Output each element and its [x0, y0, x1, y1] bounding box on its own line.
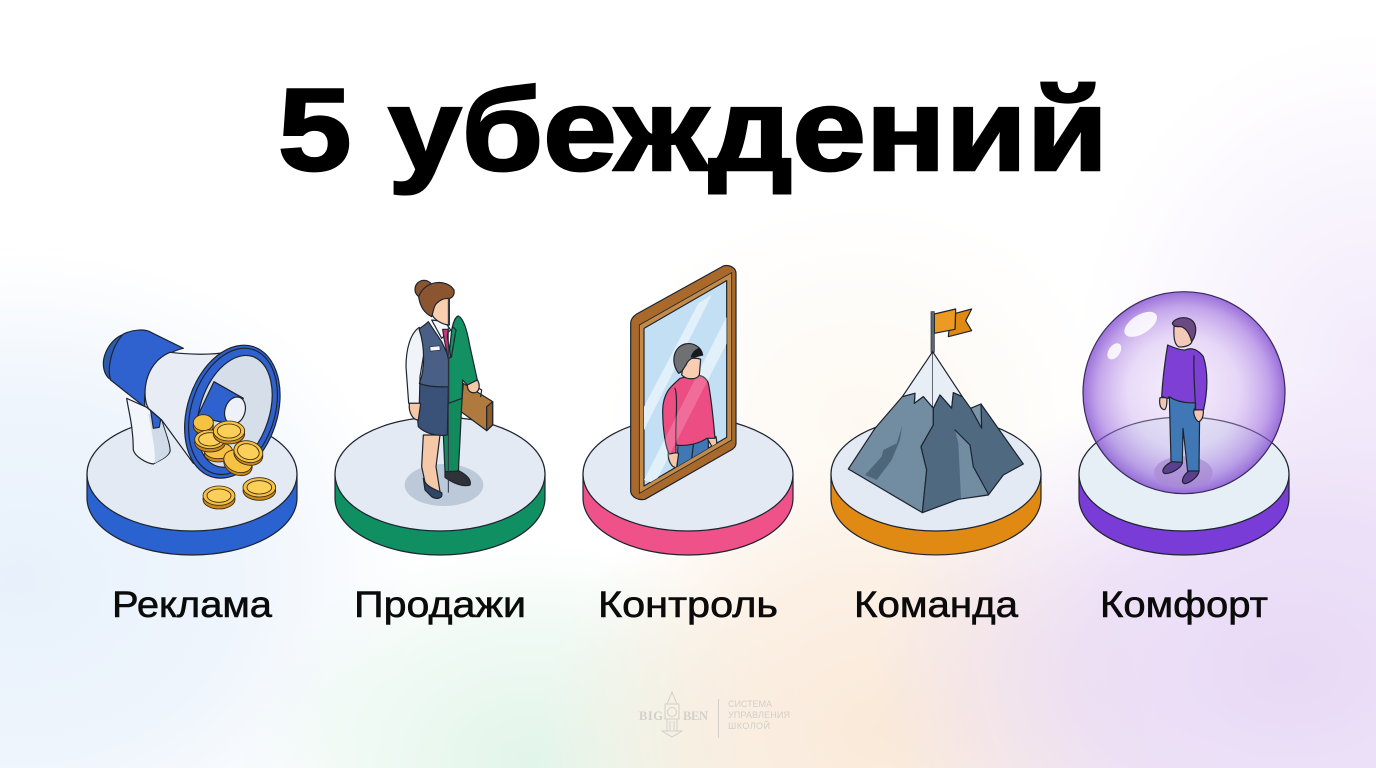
logo: Big Ben: [639, 692, 790, 738]
label: Продажи: Продажи: [354, 584, 526, 625]
coins: [193, 415, 276, 509]
icon: half saleswoman half businessman: [405, 280, 493, 506]
panel: Комфорт: [1079, 292, 1289, 625]
icon: mirror with reflection: [631, 266, 736, 500]
panel: Продажи: [335, 280, 545, 625]
platform: green: [335, 417, 545, 555]
panel: Реклама: [87, 330, 297, 625]
icon: megaphone with coins: [103, 330, 296, 509]
platform: blue: [87, 417, 297, 555]
panel: Контроль: [583, 266, 793, 625]
label: Реклама: Реклама: [112, 584, 272, 625]
logo: Big Ben: СИСТЕМА: [728, 699, 772, 709]
icon: person in a bubble: [1083, 292, 1285, 494]
icon: mountain with flag: [848, 309, 1023, 513]
panel: Команда: [831, 309, 1041, 625]
logo: Big Ben: BIG: [639, 709, 663, 723]
logo: Big Ben: BEN: [683, 709, 708, 723]
label: Комфорт: Комфорт: [1100, 584, 1268, 625]
title: 5 убеждений: [278, 64, 1108, 195]
platform: orange: [831, 417, 1041, 555]
platform: purple: [1079, 417, 1289, 555]
logo: Big Ben: УПРАВЛЕНИЯ: [728, 710, 790, 720]
label: Контроль: Контроль: [598, 584, 778, 625]
platform: pink: [583, 417, 793, 555]
label: Команда: Команда: [854, 584, 1018, 625]
logo: Big Ben: ШКОЛОЙ: [728, 720, 770, 731]
